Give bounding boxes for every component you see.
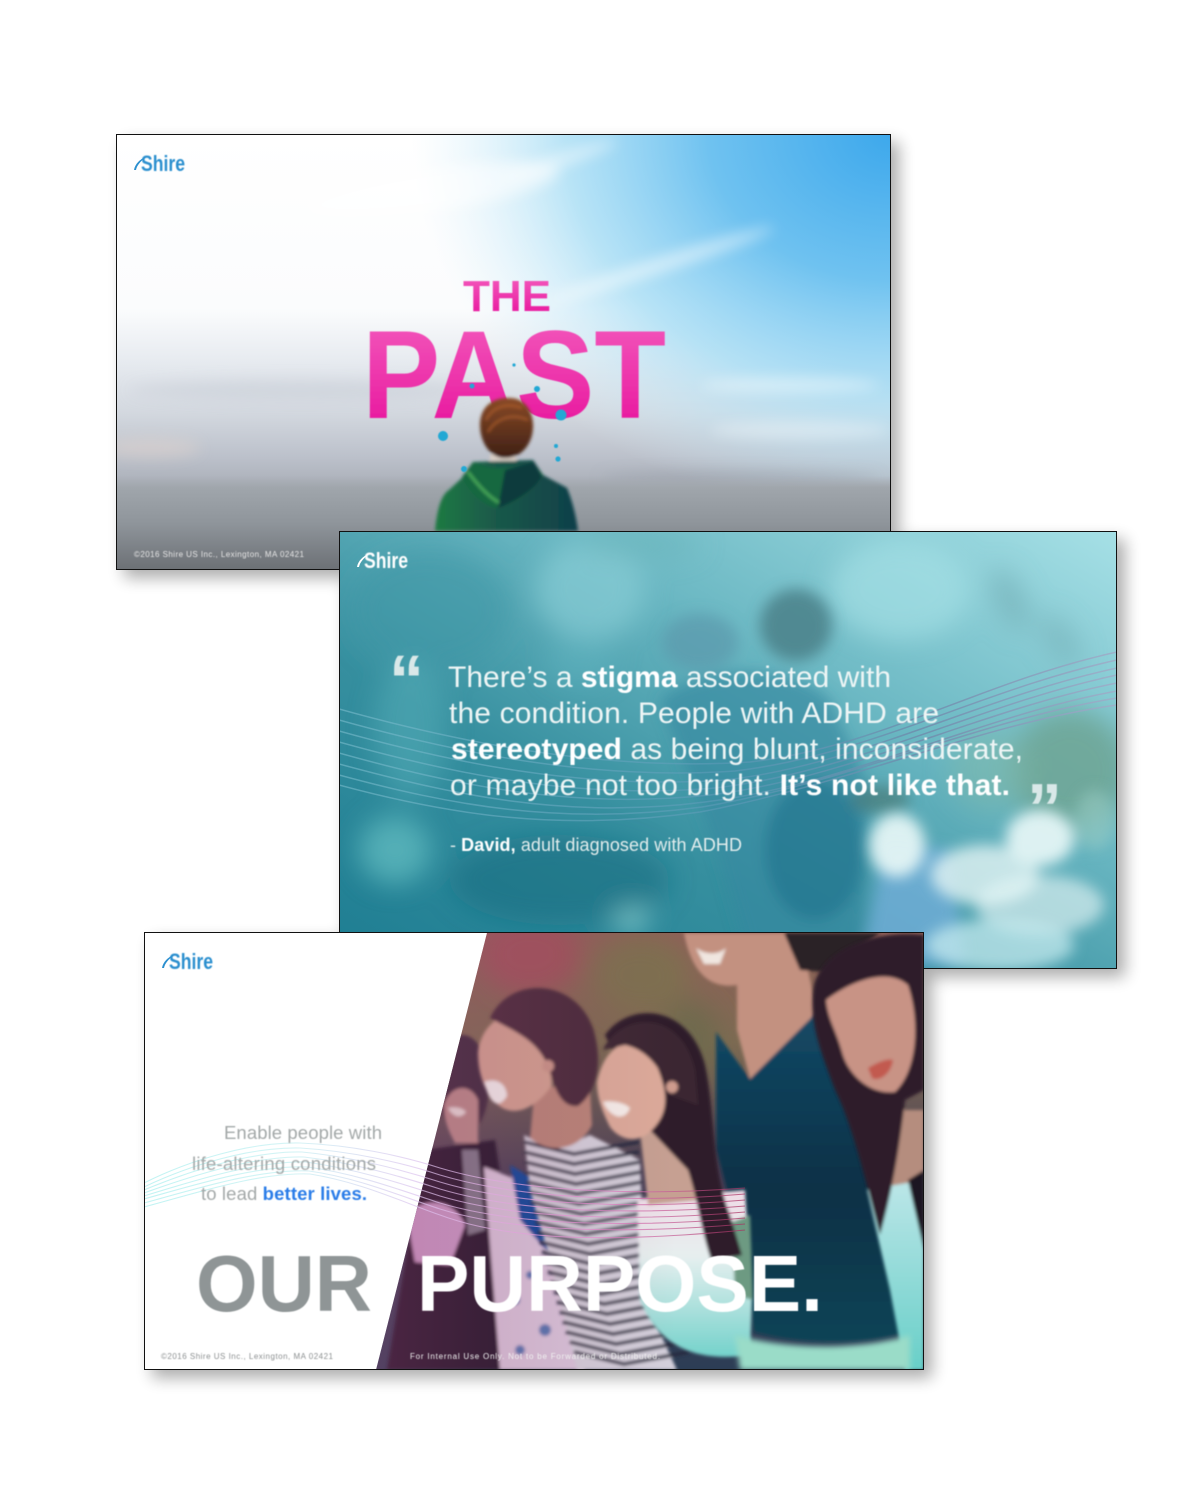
tall man bbox=[684, 933, 907, 1342]
hood folds bbox=[462, 462, 543, 508]
navy shirt bbox=[716, 1010, 907, 1342]
slide border bbox=[116, 134, 890, 570]
copyright: ©2016 Shire US Inc., Lexington, MA 02421 bbox=[134, 550, 305, 559]
splash dots bbox=[438, 363, 566, 472]
slide: our purpose bbox=[144, 915, 924, 1370]
olive sleeve bbox=[732, 1215, 753, 1300]
blurred white blossoms bbox=[869, 790, 1115, 971]
slide border bbox=[144, 932, 924, 1370]
long hair bbox=[812, 934, 924, 1235]
purpose statement: to lead better lives. bbox=[201, 1183, 367, 1204]
face bbox=[478, 1012, 552, 1111]
background foliage bbox=[477, 933, 716, 1053]
center woman bbox=[597, 1013, 753, 1357]
purpose statement bbox=[192, 1122, 382, 1204]
quote text: or maybe not too bright. It’s not like that. bbox=[450, 769, 1010, 802]
attribution: - David, adult diagnosed with ADHD bbox=[450, 835, 742, 855]
hair bbox=[480, 398, 533, 458]
smile bbox=[696, 948, 726, 964]
logo: shire: Shire bbox=[141, 151, 185, 176]
striped shirt bbox=[524, 1135, 677, 1370]
title: the: THE bbox=[463, 273, 551, 321]
neck bbox=[530, 1085, 592, 1148]
dark hair bbox=[784, 933, 880, 972]
purpose statement: Enable people with bbox=[224, 1122, 382, 1143]
slide: quote bbox=[339, 531, 1130, 971]
shirt stripes bbox=[524, 1142, 689, 1364]
hair back bbox=[605, 1013, 742, 1262]
slide shadows bbox=[124, 142, 1125, 1378]
quote text bbox=[448, 661, 1023, 802]
wave lines bbox=[339, 652, 1117, 821]
quote text: There’s a stigma associated with bbox=[448, 661, 891, 694]
internal use notice: For Internal Use Only. Not to be Forwarded or Distributed. bbox=[410, 1352, 660, 1361]
infographic canvas bbox=[114, 132, 1134, 1388]
copyright: ©2016 Shire US Inc., Lexington, MA 02421 bbox=[161, 1352, 334, 1361]
face bbox=[826, 977, 915, 1092]
heading: our: OUR bbox=[196, 1239, 372, 1328]
blue sky wash bbox=[442, 135, 890, 482]
laughing man in striped shirt bbox=[478, 988, 689, 1370]
teal top bbox=[867, 1180, 924, 1370]
teal background bbox=[339, 531, 1117, 969]
right woman bbox=[812, 934, 924, 1370]
mouth bbox=[484, 1081, 507, 1104]
logo: shire: Shire bbox=[169, 949, 213, 974]
clouds bbox=[100, 136, 890, 484]
wave lines bbox=[144, 1143, 745, 1238]
photo of friends bbox=[376, 915, 924, 1370]
close quote mark: ” bbox=[1027, 769, 1062, 847]
quote text: the condition. People with ADHD are bbox=[449, 697, 939, 730]
slide border bbox=[340, 532, 1116, 968]
open quote mark: “ bbox=[389, 641, 424, 719]
hair front bbox=[603, 1022, 698, 1105]
logo: shire bbox=[134, 154, 186, 172]
neck bbox=[490, 454, 516, 461]
heading: purpose: PURPOSE. bbox=[417, 1239, 823, 1328]
hair bbox=[490, 988, 598, 1106]
quote text: stereotyped as being blunt, inconsiderate, bbox=[451, 733, 1023, 766]
mouth bbox=[868, 1059, 893, 1079]
face bbox=[597, 1043, 665, 1139]
far left woman bbox=[387, 1035, 585, 1370]
face and neck bbox=[684, 933, 817, 1079]
hoodie body bbox=[435, 460, 578, 531]
photo background bbox=[376, 933, 924, 1370]
blurred people bbox=[660, 589, 965, 965]
logo: shire: Shire bbox=[364, 548, 408, 573]
purpose statement: life-altering conditions bbox=[192, 1153, 376, 1174]
left tint bbox=[376, 933, 676, 1370]
sea bbox=[116, 476, 891, 570]
blurred foliage bbox=[350, 531, 1130, 932]
sky background bbox=[117, 135, 890, 486]
chest bbox=[640, 1130, 700, 1205]
white panel bbox=[145, 933, 487, 1369]
jeans bbox=[735, 1335, 910, 1370]
icon: person from behind bbox=[435, 398, 578, 531]
slide: the past bbox=[100, 134, 891, 570]
chest bbox=[870, 1110, 924, 1195]
logo: shire bbox=[357, 551, 408, 569]
title: past: PAST bbox=[362, 306, 666, 445]
mouth bbox=[603, 1101, 630, 1117]
blouse bbox=[637, 1190, 752, 1357]
